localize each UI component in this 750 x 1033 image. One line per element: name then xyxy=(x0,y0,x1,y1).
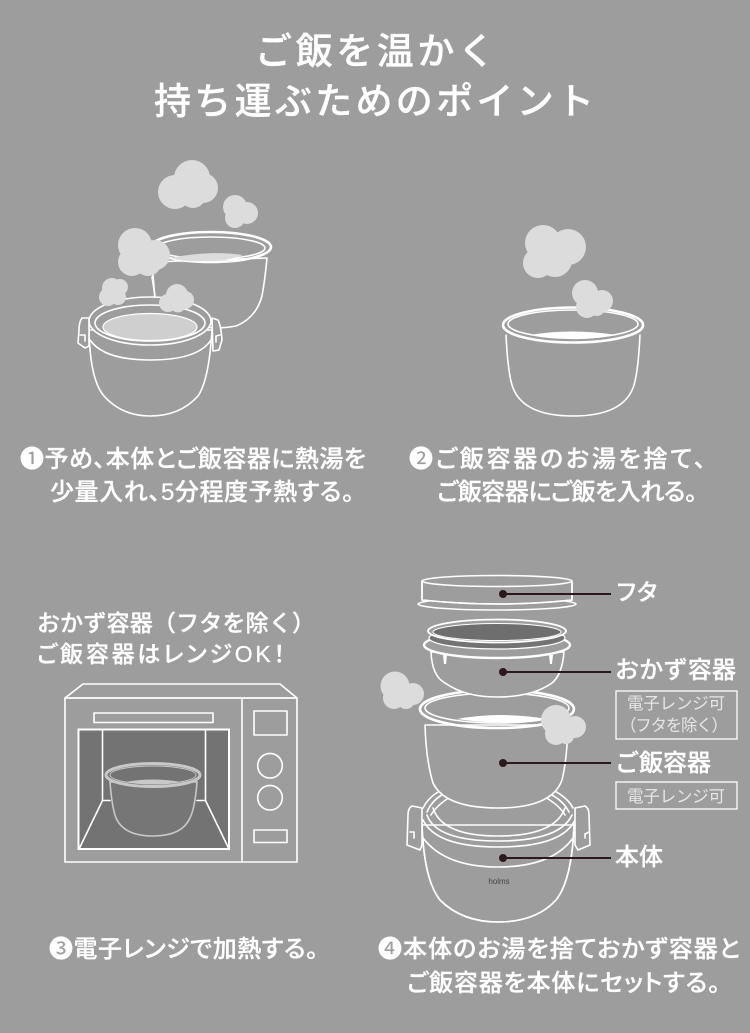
part label: side dish container: おかず容器 xyxy=(615,657,736,684)
step 1 text: ❶予め、本体とご飯容器に熱湯を xyxy=(20,446,366,473)
oven window xyxy=(78,730,229,849)
illustration: microwave xyxy=(65,684,297,862)
badge: microwave ok xyxy=(616,782,737,809)
front pot xyxy=(78,277,222,416)
step 3 text: ❸電子レンジで加熱する。 xyxy=(49,936,318,963)
step 1 text: 少量入れ、5分程度予熱する。 xyxy=(50,479,354,506)
badge: microwave ok except lid: （フタを除く） xyxy=(620,716,728,735)
step 1 text xyxy=(20,446,366,506)
badge: microwave ok except lid: 電子レンジ可 xyxy=(627,695,725,713)
title: ご飯を温かく xyxy=(255,31,495,72)
badge: microwave ok except lid xyxy=(616,691,737,739)
step 2 text: ご飯容器にご飯を入れる。 xyxy=(437,479,697,506)
steam clouds xyxy=(523,225,613,318)
steam clouds xyxy=(380,672,586,745)
lid xyxy=(418,576,576,610)
part label: main body: 本体 xyxy=(615,844,663,871)
main body xyxy=(407,790,590,922)
main body: holms xyxy=(488,877,510,886)
badge: microwave ok: 電子レンジ可 xyxy=(627,788,725,806)
step 2 text: ❷ご飯容器のお湯を捨て、 xyxy=(409,446,706,473)
part label: rice container: ご飯容器 xyxy=(615,750,711,777)
part label: lid: フタ xyxy=(615,579,659,605)
illustration: step 2 pot with steam xyxy=(503,225,643,416)
illustration: step 1 pots with steam xyxy=(78,160,271,416)
controls xyxy=(254,711,287,842)
back pot xyxy=(151,232,271,328)
microwave note xyxy=(37,610,315,667)
step 4 text: ❹本体のお湯を捨ておかず容器と xyxy=(378,936,740,963)
pot in oven xyxy=(106,764,200,836)
microwave note: おかず容器（フタを除く） xyxy=(37,610,315,636)
step 2 text xyxy=(409,446,706,506)
leader lines xyxy=(499,590,611,862)
rice container xyxy=(420,690,574,808)
step 4 text xyxy=(378,936,740,997)
step 4 text: ご飯容器を本体にセットする。 xyxy=(407,970,720,997)
steam clouds xyxy=(99,160,258,312)
title: 持ち運ぶためのポイント xyxy=(154,81,594,122)
side dish container xyxy=(424,620,570,697)
microwave note: ご飯容器はレンジOK！ xyxy=(37,641,285,667)
illustration: exploded lunch jar xyxy=(380,576,611,922)
title xyxy=(154,31,594,122)
